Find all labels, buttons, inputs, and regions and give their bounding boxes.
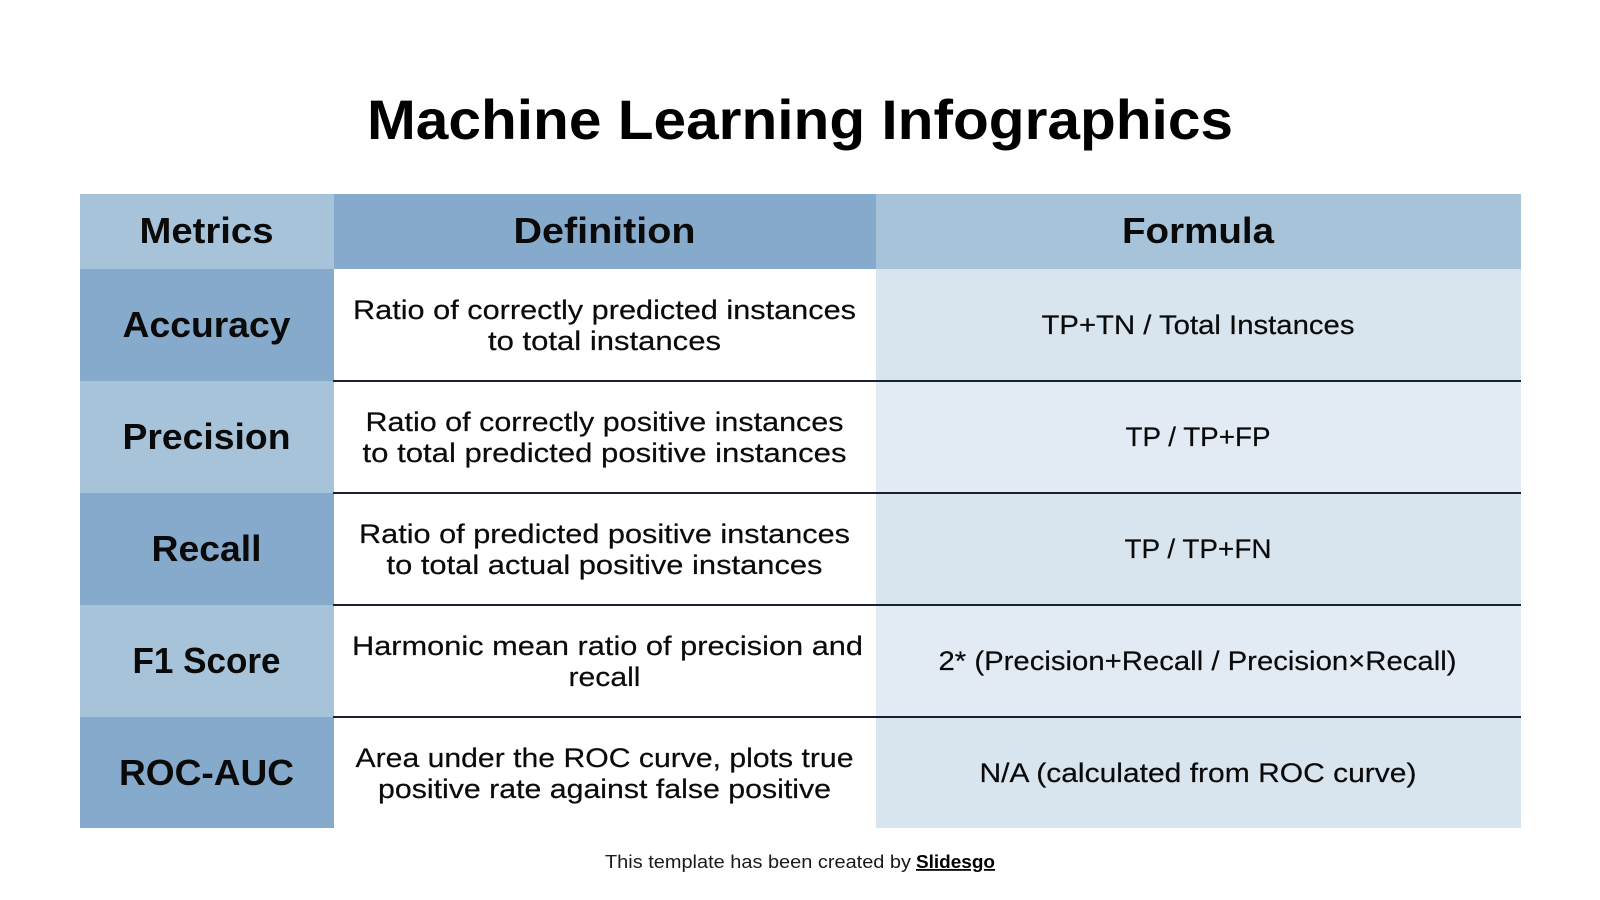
row: Recall: TP / TP+FN <box>1124 534 1272 564</box>
header row: Definition <box>514 210 696 251</box>
row: ROC-AUC: N/A (calculated from ROC curve) <box>980 758 1416 788</box>
row: Accuracy: Ratio of correctly predicted instances <box>353 295 856 325</box>
header row <box>80 194 1521 269</box>
header row: Formula <box>1122 210 1275 251</box>
row: Precision: Ratio of correctly positive instances <box>366 407 844 437</box>
row: Recall: to total actual positive instances <box>386 550 822 580</box>
row: F1 Score: F1 Score <box>132 640 280 681</box>
row: F1 Score: 2* (Precision+Recall / Precision×Recall) <box>938 646 1456 676</box>
row: Recall: Recall <box>152 528 262 569</box>
row: Accuracy: to total instances <box>488 326 721 356</box>
row: Accuracy <box>80 269 1521 381</box>
row: ROC-AUC: ROC-AUC <box>119 752 294 793</box>
row: Accuracy: Accuracy <box>122 304 290 345</box>
row: Recall: Ratio of predicted positive instances <box>359 519 850 549</box>
row: Precision <box>80 381 1521 493</box>
row: F1 Score: Harmonic mean ratio of precision and <box>352 631 863 661</box>
row: Precision: to total predicted positive instances <box>362 438 846 468</box>
footer credit: This template has been created by <box>605 852 911 872</box>
row: ROC-AUC <box>80 717 1521 828</box>
row: F1 Score <box>80 605 1521 717</box>
header row: Metrics <box>140 210 274 251</box>
row: Precision: Precision <box>122 416 290 457</box>
row: Recall <box>80 493 1521 605</box>
row: Accuracy: TP+TN / Total Instances <box>1042 310 1354 340</box>
table <box>80 194 1521 828</box>
row: F1 Score: recall <box>568 662 640 692</box>
footer credit: Slidesgo <box>916 852 995 872</box>
row: Precision: TP / TP+FP <box>1126 422 1270 452</box>
row: ROC-AUC: positive rate against false positive <box>378 774 831 804</box>
row: ROC-AUC: Area under the ROC curve, plots true <box>356 743 854 773</box>
title: Machine Learning Infographics <box>367 88 1233 151</box>
